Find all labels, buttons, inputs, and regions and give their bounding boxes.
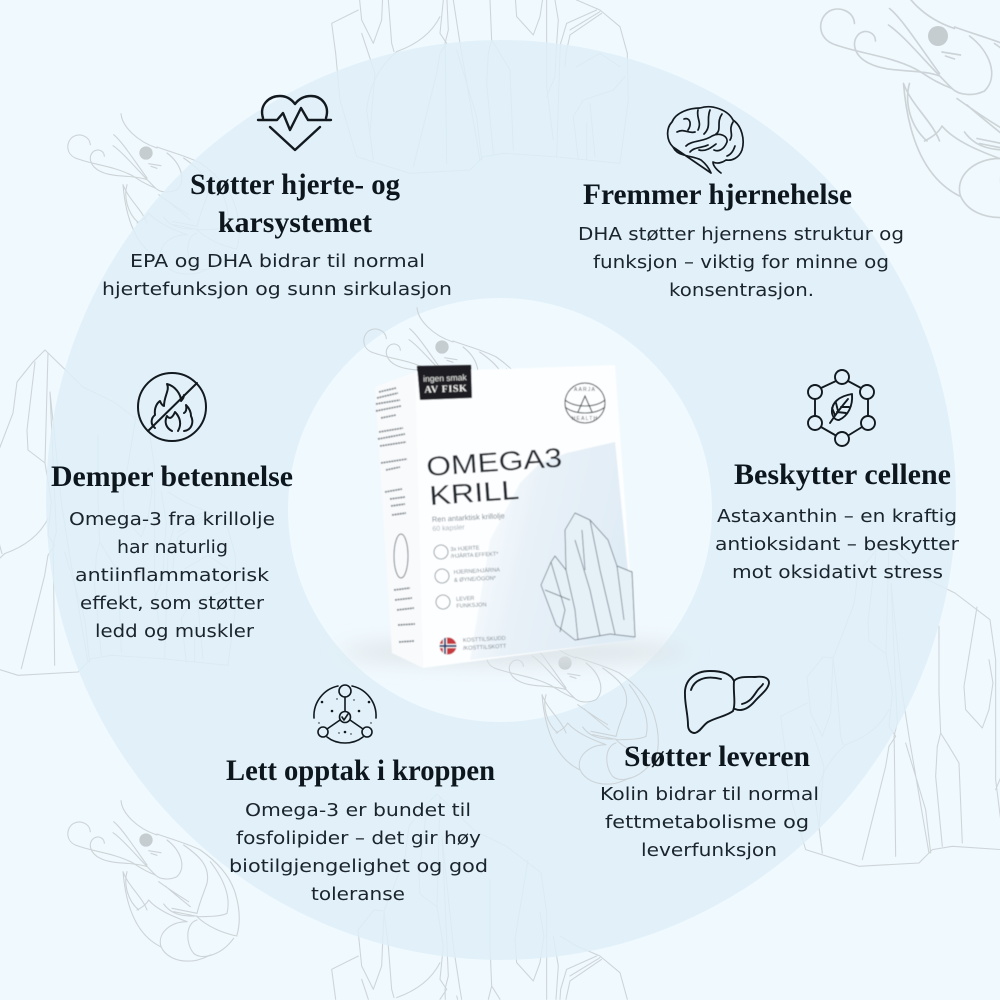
product benefits: FUNKSJON (456, 602, 487, 610)
icon: brain (668, 107, 743, 173)
body text (229, 800, 488, 905)
body text: EPA og DHA bidrar til normal (130, 251, 425, 272)
body text (578, 224, 904, 301)
icon: heart with pulse (258, 96, 331, 150)
inner light circle (288, 298, 712, 722)
product benefits (434, 544, 502, 610)
body text: effekt, som støtter (80, 593, 265, 614)
heading: Støtter leveren (624, 740, 810, 773)
body text: Astaxanthin – en kraftig (717, 506, 957, 527)
heading (190, 168, 400, 239)
product title: OMEGA3 (425, 443, 563, 482)
decorative iceberg bottom centre (332, 794, 627, 999)
body text: konsentrasjon. (669, 280, 814, 301)
decorative shrimp top left (68, 114, 239, 274)
black label (417, 365, 472, 400)
product subtitle: Ren antarktisk krillolje (432, 511, 505, 524)
decorative shrimp top right (821, 0, 1000, 218)
body text: har naturlig (117, 537, 228, 558)
body text: funksjon – viktig for minne og (593, 252, 889, 273)
body text: hjertefunksjon og sunn sirkulasjon (102, 279, 452, 300)
body text: ledd og muskler (95, 621, 255, 642)
product box (340, 365, 690, 668)
heading: Demper betennelse (51, 460, 293, 493)
product iceberg (541, 513, 635, 640)
brand logo: AARJA (574, 387, 596, 393)
heading: Fremmer hjernehelse (583, 178, 852, 211)
heading: Lett opptak i kroppen (226, 754, 495, 787)
panel: absorption (226, 685, 495, 905)
body text: fettmetabolisme og (605, 812, 809, 833)
brand logo (565, 383, 605, 423)
brand logo: HEALTH (572, 416, 598, 422)
panel: heart (102, 96, 452, 300)
icon: crossed flame (138, 373, 206, 441)
panel: inflammation (51, 373, 293, 642)
decorative iceberg right (781, 541, 1000, 866)
product benefits: HJERNE/HJÄRNA (453, 566, 500, 576)
panel: cells (715, 370, 960, 583)
heading: karsystemet (218, 206, 372, 239)
product benefits: LEVER (456, 596, 475, 603)
body text: DHA støtter hjernens struktur og (578, 224, 904, 245)
body text: biotilgjengelighet og god (229, 856, 488, 877)
box ground shadow (340, 641, 690, 663)
product benefits: /HJÄRTA EFFEKT* (451, 550, 499, 560)
product benefits: 3x HJERTE (450, 545, 480, 553)
decorative shrimp centre bottom (487, 624, 658, 784)
body text: fosfolipider – det gir høy (236, 828, 481, 849)
icon: molecule (314, 685, 376, 743)
icon: leaf in hexagon network (808, 370, 875, 446)
body text: mot oksidativt stress (732, 562, 943, 583)
product subtitle (432, 511, 505, 533)
body text: Omega-3 er bundet til (245, 800, 471, 821)
black label: AV FISK (424, 383, 468, 396)
body text (715, 506, 960, 583)
panel: brain (578, 107, 904, 301)
heading: Støtter hjerte- og (190, 168, 400, 201)
body text (600, 784, 819, 861)
decorative iceberg left (0, 350, 236, 675)
body text (102, 251, 452, 300)
product title (425, 443, 563, 511)
box side panel print (376, 388, 415, 642)
norwegian flag: /KOSTTILSKOTT (463, 644, 507, 652)
body text: leverfunksjon (641, 840, 777, 861)
black label: ingen smak (423, 372, 468, 384)
body text: antioksidant – beskytter (715, 534, 960, 555)
decorative iceberg top centre (332, 0, 628, 173)
panel: liver (600, 671, 819, 861)
icon: liver (685, 671, 769, 733)
product benefits: & ØYNE/ÖGON* (454, 575, 497, 584)
decorative shrimp centre top (364, 308, 535, 468)
box faces (375, 365, 635, 668)
heading: Beskytter cellene (734, 458, 951, 491)
body text: Kolin bidrar til normal (600, 784, 819, 805)
decorative shrimp bottom left (68, 801, 239, 961)
body text (69, 509, 275, 642)
body text: Omega-3 fra krillolje (69, 509, 275, 530)
body text: antiinflammatorisk (75, 565, 270, 586)
norwegian flag: KOSTTILSKUDD (463, 636, 506, 644)
body text: toleranse (311, 884, 405, 905)
norwegian flag (440, 636, 507, 654)
product subtitle: 60 kapsler (432, 524, 465, 533)
product title: KRILL (428, 475, 520, 511)
